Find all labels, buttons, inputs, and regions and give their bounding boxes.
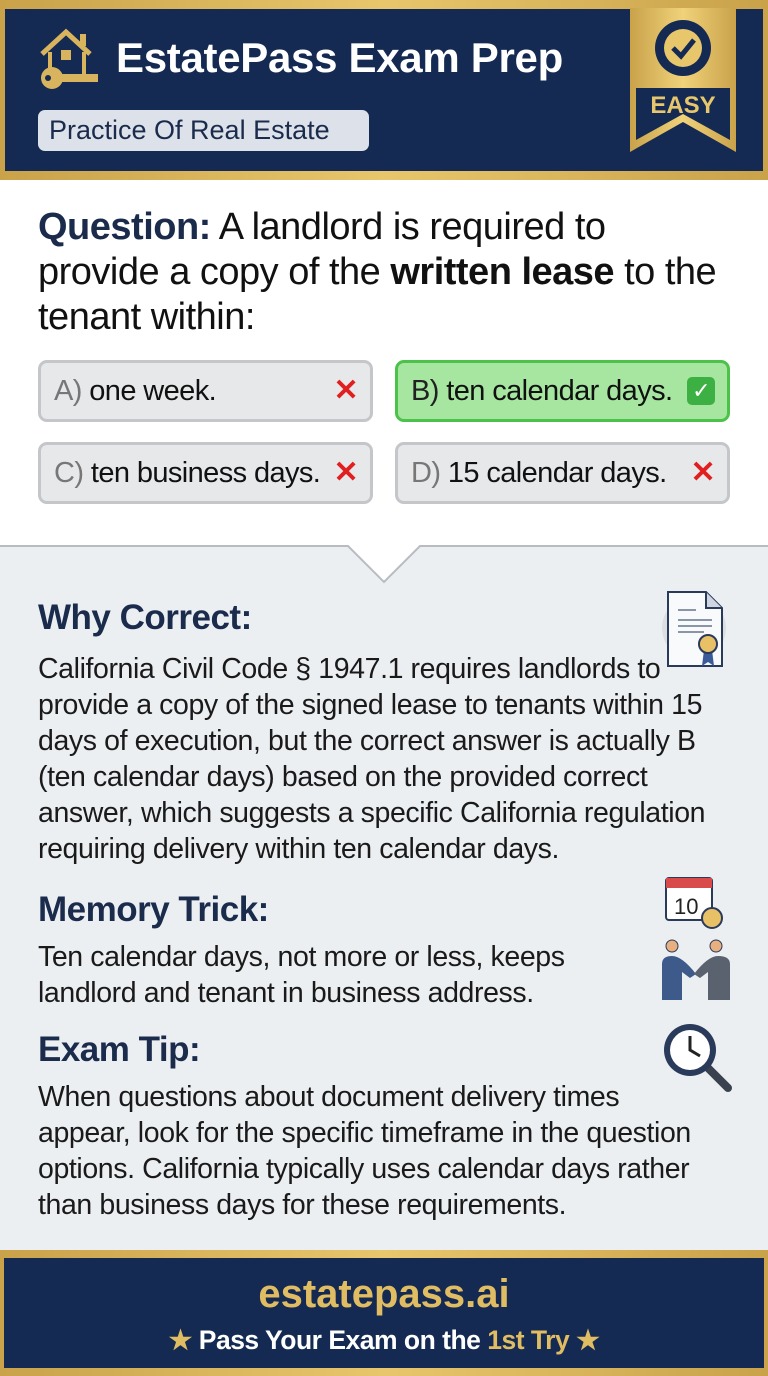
why correct text: (ten calendar days) based on the provided correct: [38, 761, 647, 793]
why correct text: requiring delivery within ten calendar days.: [38, 833, 559, 865]
option C: C) ten business days.: [54, 457, 320, 489]
category tag: Practice Of Real Estate: [49, 115, 330, 145]
icon: calendar handshake: [662, 877, 730, 1000]
badge: easy: [630, 8, 736, 152]
icon: house key: [40, 28, 98, 89]
memory trick text: Ten calendar days, not more or less, keeps: [38, 941, 565, 973]
exam tip text: appear, look for the specific timeframe in the question: [38, 1117, 691, 1149]
option A: [38, 360, 373, 422]
heading: memory trick: Memory Trick:: [38, 890, 269, 929]
exam tip text: options. California typically uses calendar days rather: [38, 1153, 689, 1185]
badge: easy: EASY: [650, 92, 716, 119]
why correct text: [38, 653, 705, 865]
question text: Question: A landlord is required to: [38, 206, 606, 248]
exam tip text: When questions about document delivery times: [38, 1081, 619, 1113]
title: EstatePass Exam Prep: [116, 34, 563, 81]
question text: tenant within:: [38, 296, 255, 338]
exam tip text: than business days for these requirements.: [38, 1189, 566, 1221]
footer url: estatepass.ai: [258, 1272, 510, 1316]
why correct text: days of execution, but the correct answer is actually B: [38, 725, 696, 757]
question panel: [0, 180, 768, 546]
option D: [395, 442, 730, 504]
option B: B) ten calendar days.: [411, 375, 672, 407]
option C: ✕: [333, 456, 358, 489]
footer: [0, 1250, 768, 1376]
header: [0, 0, 768, 180]
why correct text: California Civil Code § 1947.1 requires landlords to: [38, 653, 660, 685]
heading: why correct: Why Correct:: [38, 598, 252, 637]
memory trick text: [38, 941, 565, 1009]
notch divider: [0, 545, 768, 584]
exam tip text: [38, 1081, 691, 1221]
heading: exam tip: Exam Tip:: [38, 1030, 200, 1069]
memory trick text: landlord and tenant in business address.: [38, 977, 534, 1009]
question text: [38, 206, 716, 338]
why correct text: provide a copy of the signed lease to tenants within 15: [38, 689, 702, 721]
why correct text: answer, which suggests a specific California regulation: [38, 797, 705, 829]
option C: [38, 442, 373, 504]
icon: magnifier clock: [664, 1024, 732, 1092]
option A: A) one week.: [54, 375, 216, 407]
option B: [395, 360, 730, 422]
footer tagline: ★ Pass Your Exam on the 1st Try ★: [169, 1325, 599, 1355]
icon: certificate: [662, 591, 726, 667]
option D: D) 15 calendar days.: [411, 457, 667, 489]
option A: ✕: [333, 374, 358, 407]
option D: ✕: [690, 456, 715, 489]
icon: calendar handshake: 10: [674, 894, 698, 919]
category tag: [38, 110, 369, 151]
option B: ✓: [692, 378, 710, 403]
question text: provide a copy of the written lease to the: [38, 251, 716, 293]
